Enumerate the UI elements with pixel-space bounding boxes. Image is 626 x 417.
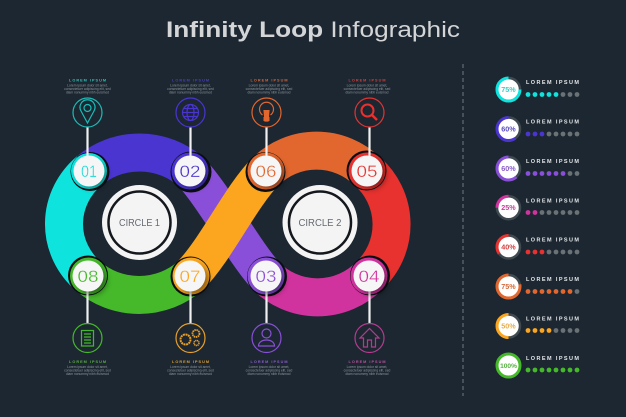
legend row 4: 25% pink: LOREM IPSUM (526, 198, 579, 204)
caption: top 1 (64, 78, 111, 94)
caption: top 4 (344, 78, 391, 94)
caption: bottom 2: consectetuer adipiscing elit, sed (167, 368, 214, 372)
segment: yellow crossing (170, 171, 266, 296)
title: Infinity Loop Infographic (166, 17, 460, 42)
node 04: 04 (358, 268, 380, 286)
caption: top 3: consectetuer adipiscing elit, sed (246, 87, 293, 91)
caption: top 1: consectetuer adipiscing elit, sed (64, 87, 111, 91)
circle 2: CIRCLE 2 (298, 218, 342, 229)
caption: top 1: Lorem ipsum dolor sit amet, (67, 84, 108, 88)
node 08 (72, 260, 104, 292)
legend row 3: 60% purple (497, 157, 579, 180)
segment cap: purple (247, 256, 287, 296)
caption: bottom 4 (344, 360, 391, 376)
legend row 7: 50% yellow (497, 314, 579, 338)
node 07 (174, 260, 206, 292)
node 01 (74, 156, 104, 186)
legend row 5: 40% red (497, 236, 579, 258)
legend row 8: 100% green: 100% (500, 363, 517, 370)
caption: top 2: LOREM IPSUM (172, 78, 209, 82)
node 04 (354, 260, 384, 292)
icon: magnifier (355, 98, 384, 127)
caption: bottom 4: LOREM IPSUM (348, 360, 386, 364)
caption: top 2 (167, 78, 214, 94)
legend row 4: 25% pink (497, 196, 579, 219)
node 06: 06 (256, 163, 276, 181)
legend row 2: 60% blue (497, 118, 579, 140)
segment: red (346, 150, 392, 276)
node 02 (174, 156, 206, 186)
node 03 (250, 260, 282, 292)
segment: purple crossing (190, 171, 266, 276)
icon: light bulb (252, 98, 281, 127)
segment: cyan (64, 152, 110, 276)
circle 2 (282, 185, 358, 260)
caption: top 2: consectetuer adipiscing elit, sed (167, 87, 214, 91)
caption: bottom 4: diam nonummy nibh euismod (345, 372, 389, 376)
caption: top 2: diam nonummy nibh euismod (169, 90, 212, 94)
legend row 1: 75% cyan (497, 78, 579, 101)
segment: pink (266, 256, 390, 297)
legend row 6: 75% orange: LOREM IPSUM (526, 277, 579, 283)
connector stems (88, 127, 370, 324)
caption: bottom 4: consectetuer adipiscing elit, sed (344, 368, 391, 372)
node 06 (250, 156, 282, 186)
legend row 7: 50% yellow: 50% (501, 322, 516, 330)
caption: bottom 3: LOREM IPSUM (250, 360, 288, 364)
circle 1 (102, 185, 177, 260)
caption: top 1: diam nonummy nibh euismod (66, 90, 109, 94)
legend row 8: 100% green (497, 354, 579, 377)
caption: bottom 1: diam nonummy nibh euismod (66, 372, 109, 376)
legend row 7: 50% yellow: LOREM IPSUM (526, 316, 579, 322)
caption: bottom 1: Lorem ipsum dolor sit amet, (67, 365, 108, 369)
numbered nodes (72, 156, 384, 292)
caption: top 3: diam nonummy nibh euismod (247, 90, 291, 94)
caption: bottom 1: LOREM IPSUM (69, 360, 106, 364)
icon: user (252, 324, 281, 352)
legend row 1: 75% cyan: LOREM IPSUM (526, 80, 579, 86)
segment: blue (89, 152, 212, 192)
caption: bottom 2: Lorem ipsum dolor sit amet, (170, 365, 211, 369)
caption: bottom 2: diam nonummy nibh euismod (169, 372, 212, 376)
caption: bottom 3: consectetuer adipiscing elit, sed (246, 368, 293, 372)
caption: top 2: Lorem ipsum dolor sit amet, (170, 84, 211, 88)
caption: bottom 2 (167, 360, 214, 376)
caption: top 3: Lorem ipsum dolor sit amet, (249, 84, 289, 88)
caption: bottom 3 (246, 360, 293, 376)
caption: top 4: Lorem ipsum dolor sit amet, (347, 84, 387, 88)
node 05: 05 (356, 163, 378, 181)
legend row 3: 60% purple: 60% (501, 164, 516, 173)
icon: document (73, 324, 102, 352)
caption: top 4: LOREM IPSUM (348, 78, 386, 82)
icon: house (355, 324, 384, 352)
node 08: 08 (78, 268, 98, 286)
infinity loop ribbon (64, 150, 392, 297)
caption: bottom 3: diam nonummy nibh euismod (247, 372, 291, 376)
node shadows (77, 159, 388, 295)
node 07: 07 (180, 268, 200, 286)
node 05 (352, 156, 382, 186)
node 01: 01 (81, 163, 97, 181)
circle 1: CIRCLE 1 (119, 218, 160, 229)
caption: bottom 4: Lorem ipsum dolor sit amet, (347, 365, 387, 369)
legend row 5: 40% red: LOREM IPSUM (526, 238, 579, 244)
icon: globe (176, 98, 205, 127)
icon: location pin (73, 98, 102, 127)
caption: top 3: LOREM IPSUM (250, 78, 288, 82)
legend row 2: 60% blue: LOREM IPSUM (526, 120, 579, 126)
caption: top 4: consectetuer adipiscing elit, sed (344, 87, 391, 91)
legend row 8: 100% green: LOREM IPSUM (526, 356, 579, 362)
segment: orange (246, 151, 367, 192)
legend row 3: 60% purple: LOREM IPSUM (526, 159, 579, 165)
caption: bottom 3: Lorem ipsum dolor sit amet, (249, 365, 289, 369)
caption: bottom 1: consectetuer adipiscing elit, sed (64, 368, 111, 372)
caption: top 4: diam nonummy nibh euismod (345, 90, 389, 94)
legend row 5: 40% red: 40% (501, 242, 516, 252)
legend row 1: 75% cyan: 75% (501, 85, 516, 94)
caption: top 1: LOREM IPSUM (69, 78, 106, 82)
node 03: 03 (256, 268, 276, 286)
node 02: 02 (180, 163, 200, 181)
segment: green (68, 256, 190, 296)
legend row 4: 25% pink: 25% (501, 203, 516, 212)
legend row 6: 75% orange (497, 275, 579, 298)
caption: top 3 (246, 78, 293, 94)
legend row 6: 75% orange: 75% (501, 282, 516, 291)
icon: gears (176, 324, 205, 352)
legend row 2: 60% blue: 60% (501, 124, 516, 134)
caption: bottom 2: LOREM IPSUM (172, 360, 209, 364)
caption: bottom 1 (64, 360, 111, 376)
